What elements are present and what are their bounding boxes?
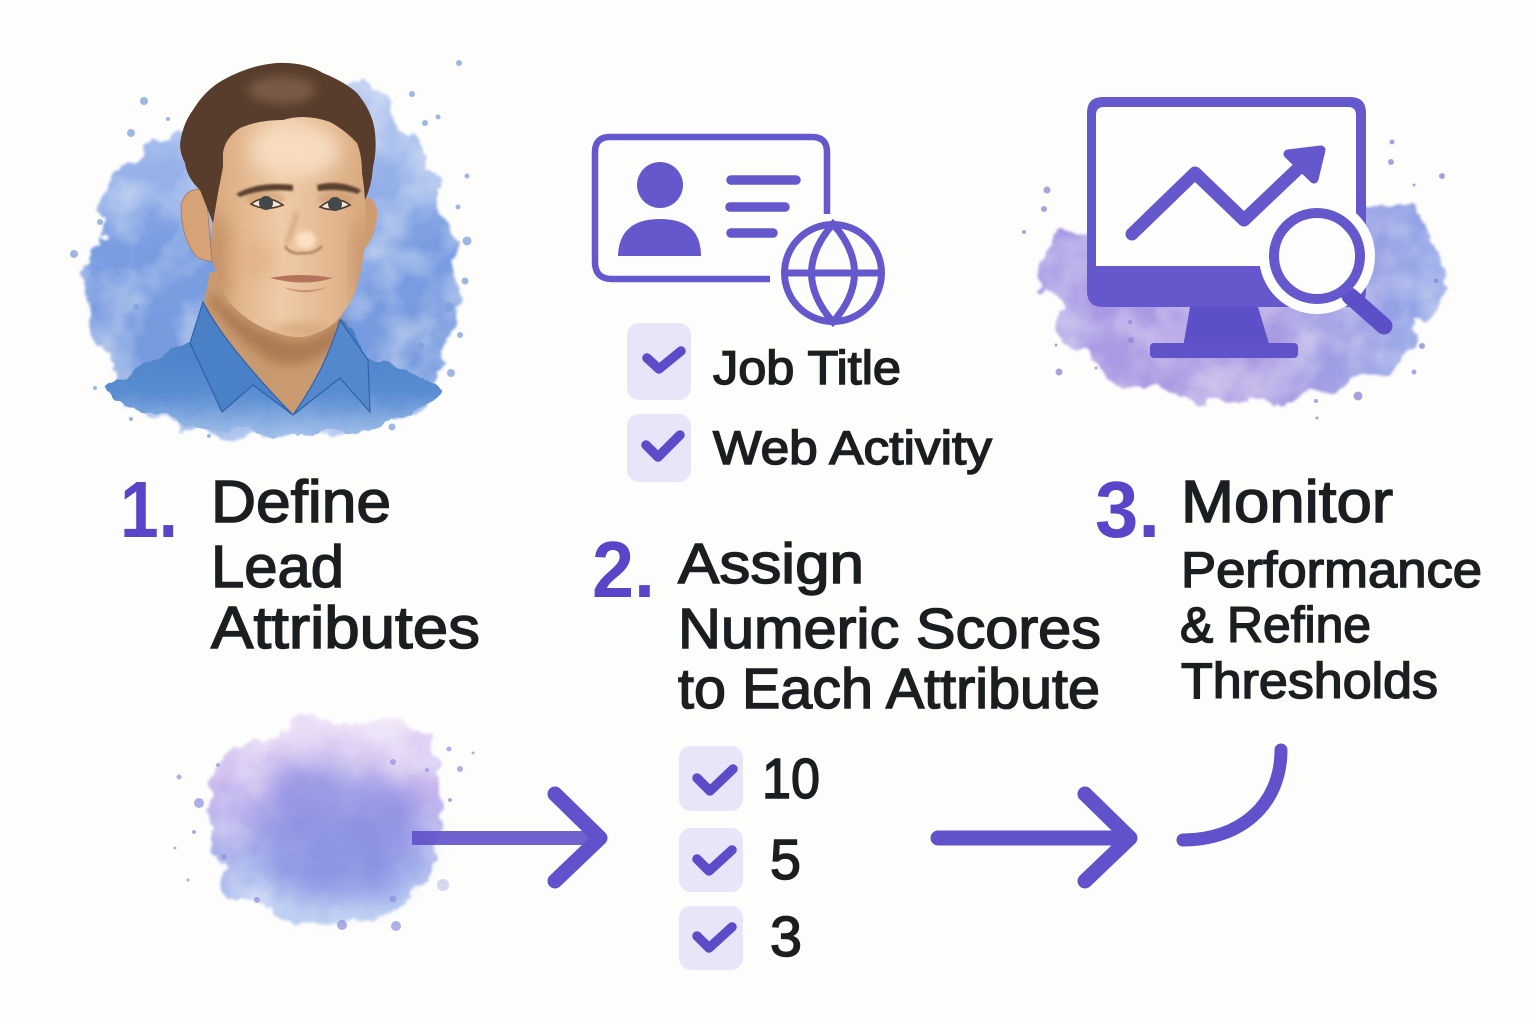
step 1 heading: Lead xyxy=(211,534,344,600)
id card frame xyxy=(595,137,827,279)
face xyxy=(212,100,366,337)
icon: id card with globe xyxy=(595,137,882,322)
step 3 heading: Monitor xyxy=(1181,469,1393,535)
step 3 description: Performance xyxy=(1181,542,1482,598)
collar xyxy=(190,302,293,415)
step 1 heading: Define xyxy=(211,469,391,535)
step 2 heading xyxy=(678,532,1101,721)
score row: 10: 10 xyxy=(762,747,820,811)
nose xyxy=(285,246,322,253)
droplets: blue xyxy=(70,60,472,438)
portrait: man in blue shirt xyxy=(105,63,442,437)
droplets: purple xyxy=(1022,140,1445,420)
watercolor splash: blue behind portrait xyxy=(92,82,456,438)
neck xyxy=(204,270,350,415)
monitor screen xyxy=(1096,107,1356,267)
right ear xyxy=(362,197,377,252)
curved connector arrow xyxy=(1183,750,1281,840)
globe xyxy=(784,224,882,322)
monitor body xyxy=(1087,97,1366,307)
step 1 heading xyxy=(211,469,480,661)
mouth xyxy=(270,275,333,282)
icon: monitor with chart and magnifier xyxy=(1087,97,1384,358)
eyebrows xyxy=(236,184,293,197)
step 2 heading: to Each Attribute xyxy=(678,657,1100,721)
monitor stand xyxy=(1183,307,1270,347)
id card text lines xyxy=(730,180,796,233)
step 3 description xyxy=(1180,542,1482,709)
trend arrow xyxy=(1132,162,1305,234)
magnifier xyxy=(1259,198,1384,326)
arrow: step 2 to step 3 xyxy=(938,794,1130,881)
step 1 number: 1. xyxy=(120,465,178,554)
step 2 heading: Numeric Scores xyxy=(678,597,1101,661)
panel: step 3 monitor performance xyxy=(1022,97,1482,840)
score row: 3: 3 xyxy=(770,905,802,969)
checklist: job title: Job Title xyxy=(713,341,901,394)
step 3 description: & Refine xyxy=(1180,597,1371,653)
watercolor splash: purple behind monitor xyxy=(1039,202,1439,402)
checklist: web activity: Web Activity xyxy=(713,421,993,474)
arrow: step 1 to step 2 xyxy=(412,794,600,881)
step 3 description: Thresholds xyxy=(1181,653,1438,709)
score row: 5: 5 xyxy=(770,828,801,892)
score row: 3 xyxy=(679,905,802,970)
hair xyxy=(180,63,376,223)
eyes xyxy=(251,199,283,208)
step 3 number: 3. xyxy=(1095,465,1160,554)
panel: step 2 assign numeric scores xyxy=(592,137,1101,970)
watercolor splash: purple to blue, lower left xyxy=(207,721,443,925)
shirt xyxy=(105,298,442,436)
step 2 number: 2. xyxy=(592,525,655,614)
checklist: job title xyxy=(627,323,901,400)
step 1 heading: Attributes xyxy=(211,595,480,661)
left ear xyxy=(181,189,212,262)
step 2 heading: Assign xyxy=(678,532,864,596)
droplets: lower left xyxy=(174,746,474,931)
score row: 10 xyxy=(679,746,820,811)
score row: 5 xyxy=(679,828,801,892)
panel: step 1 define lead attributes xyxy=(70,60,472,438)
checklist: web activity xyxy=(627,414,993,482)
monitor base xyxy=(1150,343,1298,358)
id card avatar xyxy=(618,162,701,256)
